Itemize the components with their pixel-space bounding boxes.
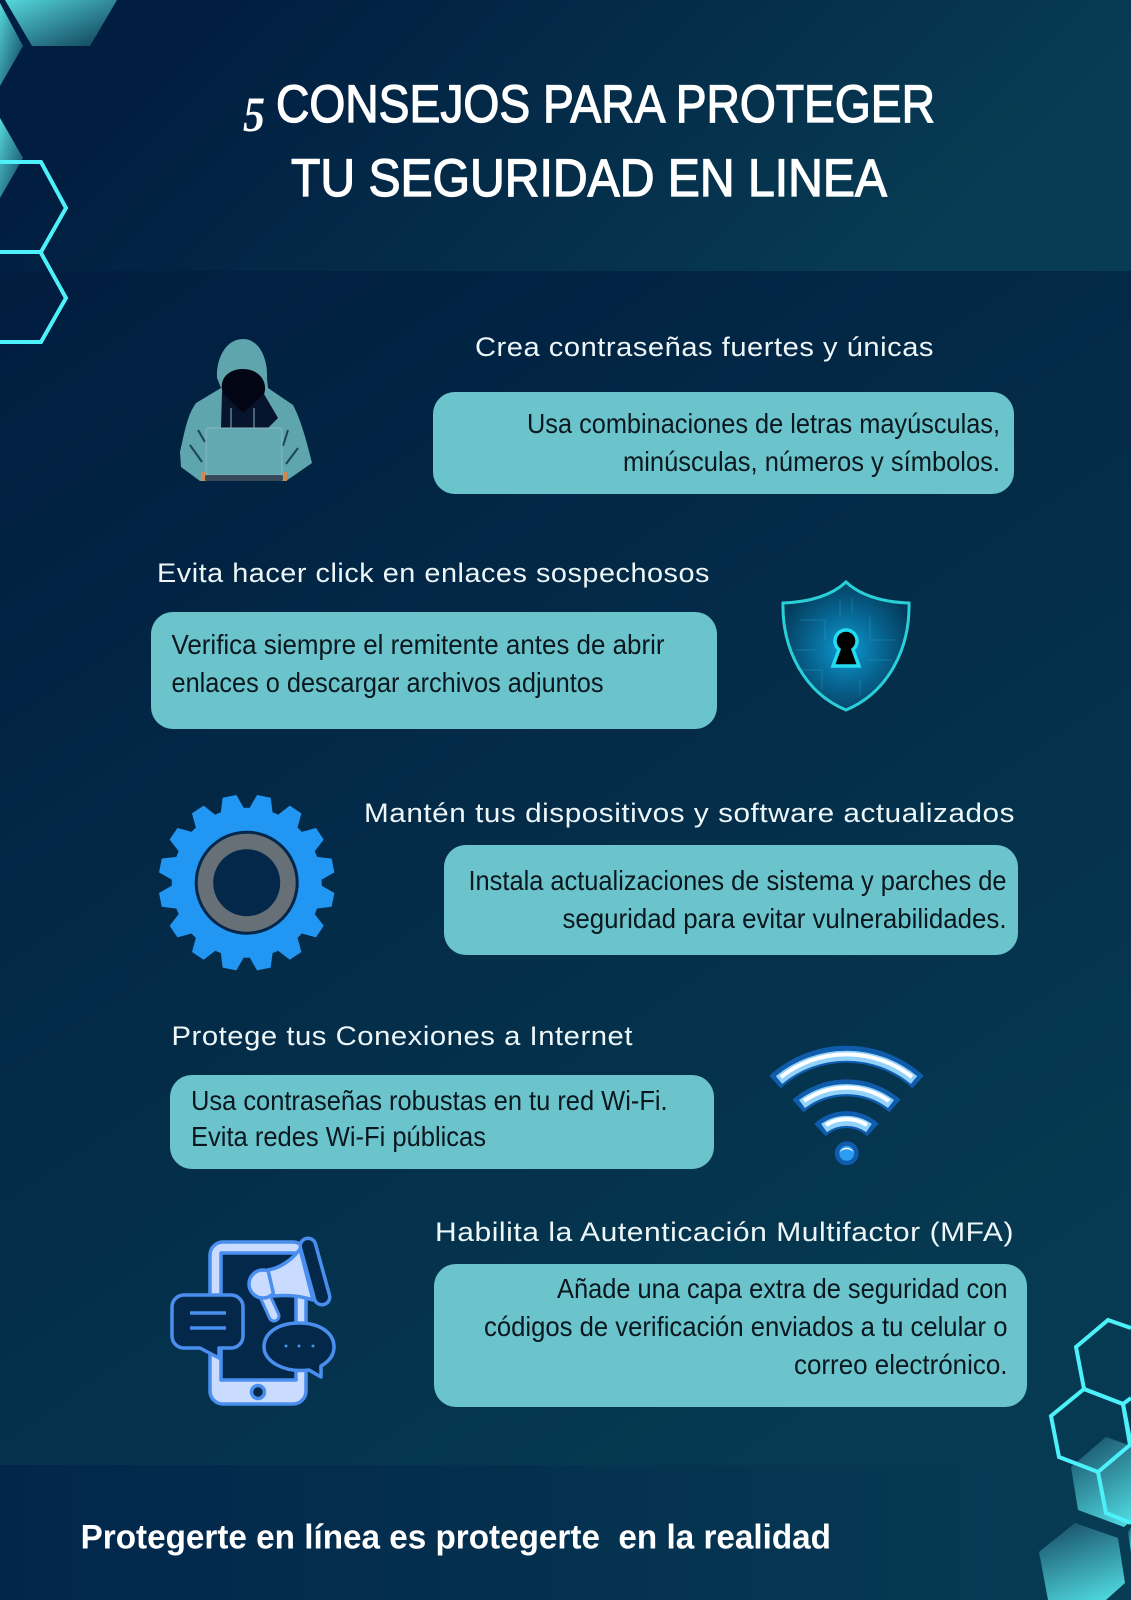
- panel: tip 1 description: Usa combinaciones de letras mayúsculas,: [527, 408, 1000, 439]
- title: [243, 75, 935, 208]
- background: footer band: [0, 1465, 1131, 1600]
- heading: tip 1: Crea contraseñas fuertes y únicas: [475, 332, 934, 362]
- panel: tip 2 description: enlaces o descargar archivos adjuntos: [172, 667, 604, 698]
- tip 3: keep software updated: [158, 794, 1018, 971]
- footer message: Protegerte en línea es protegerte en la realidad: [81, 1518, 831, 1556]
- panel: tip 5 description: códigos de verificación enviados a tu celular o: [484, 1311, 1008, 1342]
- heading: tip 4: Protege tus Conexiones a Internet: [172, 1021, 633, 1051]
- panel: tip 3 description: seguridad para evitar vulnerabilidades.: [562, 903, 1006, 934]
- icon: wifi signal: [775, 1054, 918, 1165]
- panel: tip 2 description: [151, 612, 717, 729]
- panel: tip 5 description: Añade una capa extra de seguridad con: [557, 1273, 1008, 1304]
- panel: tip 3 description: [444, 845, 1018, 955]
- tip 4: protect connections: [170, 1021, 918, 1169]
- panel: tip 5 description: [434, 1264, 1027, 1407]
- tip 5: multifactor authentication: [172, 1217, 1027, 1407]
- panel: tip 2 description: Verifica siempre el remitente antes de abrir: [172, 629, 664, 660]
- heading: tip 5: Habilita la Autenticación Multifactor (MFA): [435, 1217, 1014, 1247]
- title: TU SEGURIDAD EN LINEA: [291, 149, 888, 208]
- panel: tip 4 description: Usa contraseñas robustas en tu red Wi-Fi.: [191, 1085, 668, 1116]
- heading: tip 2: Evita hacer click en enlaces sospechosos: [157, 558, 710, 588]
- panel: tip 4 description: Evita redes Wi-Fi públicas: [191, 1121, 486, 1152]
- decoration: top-left hexagons: [0, 0, 117, 342]
- panel: tip 1 description: minúsculas, números y símbolos.: [623, 446, 1000, 477]
- background: header band: [0, 0, 1131, 271]
- panel: tip 1 description: [433, 392, 1014, 494]
- panel: tip 3 description: Instala actualizaciones de sistema y parches de: [468, 865, 1006, 896]
- icon: shield with keyhole: [783, 582, 909, 710]
- icon: phone with megaphone and chat bubbles: [172, 1242, 334, 1404]
- icon: hooded hacker with laptop: [180, 339, 312, 481]
- title: CONSEJOS PARA PROTEGER: [276, 75, 935, 134]
- title: 5: [243, 86, 265, 142]
- decoration: bottom-right hexagons: [1039, 1320, 1131, 1600]
- heading: tip 3: Mantén tus dispositivos y software actualizados: [364, 798, 1015, 828]
- tip 2: suspicious links: [151, 558, 909, 729]
- tip 1: strong passwords: [180, 332, 1014, 494]
- panel: tip 5 description: correo electrónico.: [794, 1349, 1008, 1380]
- panel: tip 4 description: [170, 1075, 714, 1169]
- background: middle band: [0, 271, 1131, 1465]
- icon: gear: [158, 794, 335, 971]
